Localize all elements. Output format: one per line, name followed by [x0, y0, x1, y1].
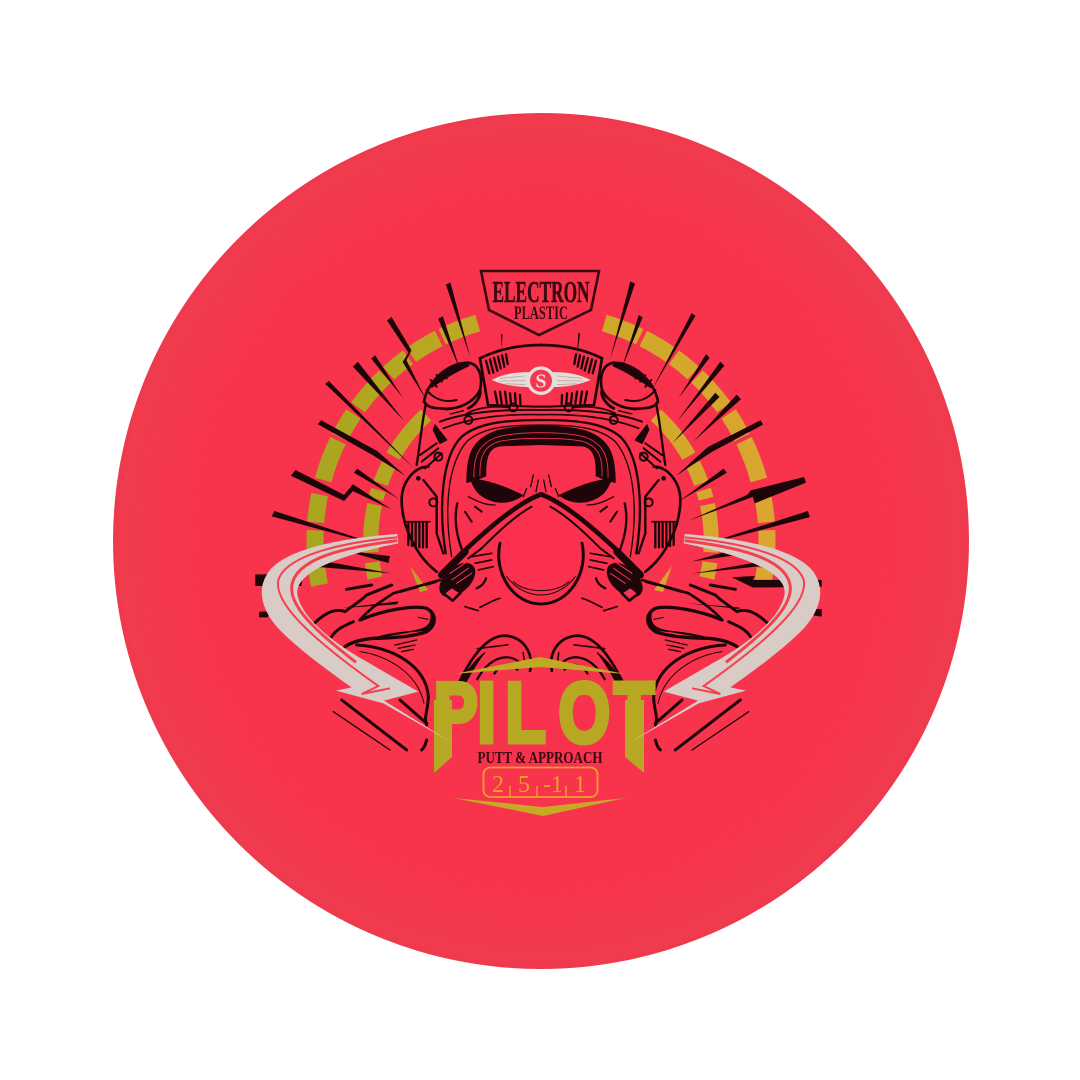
badge label: electron: ELECTRON	[492, 274, 590, 309]
disc type label: PUTT & APPROACH	[478, 748, 602, 767]
black energy rays	[255, 281, 822, 617]
pilot stems	[434, 700, 644, 773]
winged S logo	[492, 366, 591, 395]
winged S logo: S	[535, 371, 547, 393]
gold dashed arcs	[315, 323, 767, 585]
top chevron	[454, 657, 625, 674]
lightning swooshes	[262, 534, 820, 743]
box outline	[484, 768, 598, 797]
box ticks	[510, 786, 566, 797]
gold slivers by the ears	[410, 566, 672, 592]
pilot helmet and mask	[400, 345, 682, 611]
badge shield	[481, 271, 599, 335]
electron plastic badge	[481, 271, 599, 335]
flight numbers box	[484, 768, 598, 798]
bottom chevron	[454, 798, 625, 816]
badge label: plastic: PLASTIC	[514, 303, 568, 324]
hands and arms	[315, 580, 767, 750]
pilot title: PILOT	[434, 666, 654, 761]
disc	[113, 113, 969, 969]
flight numbers: 25-11	[492, 772, 586, 798]
central domes	[457, 636, 625, 686]
